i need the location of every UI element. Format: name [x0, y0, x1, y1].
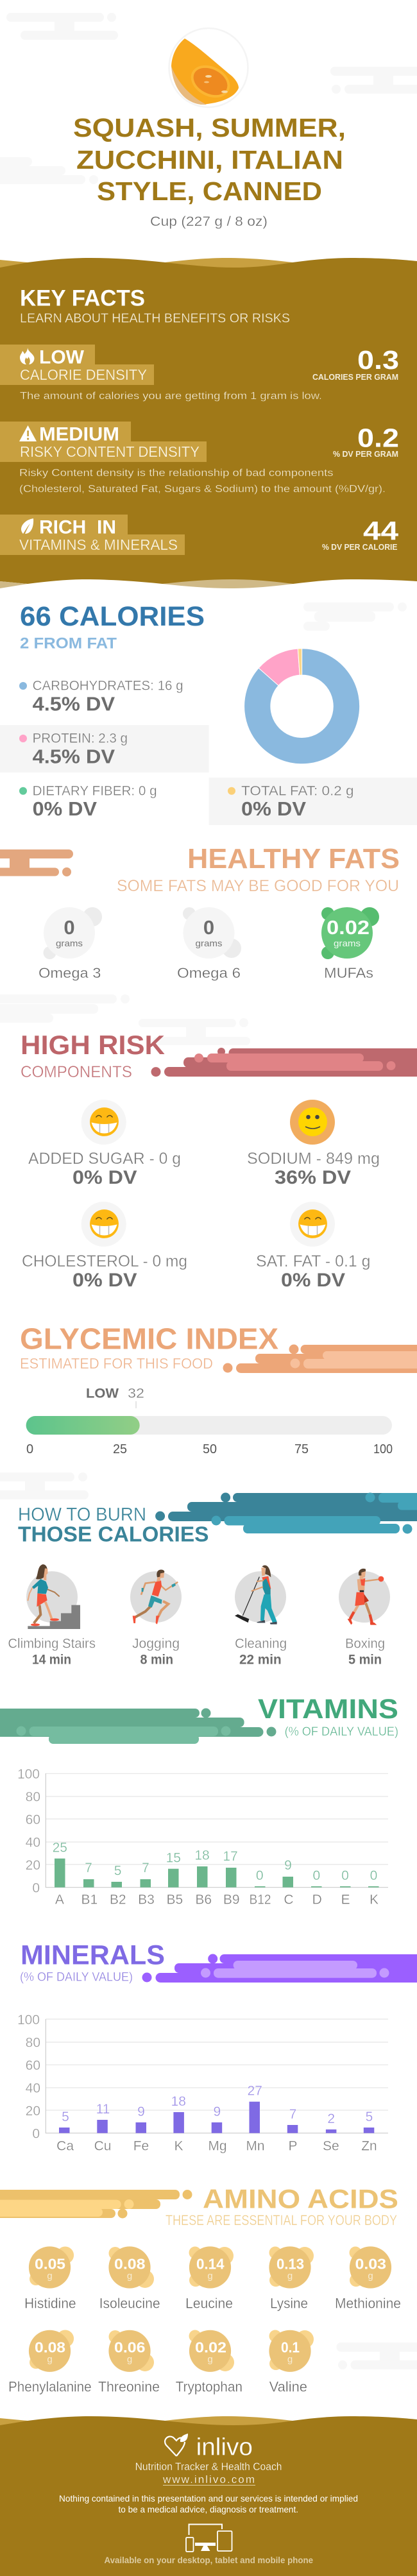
availability note: Available on your desktop, tablet and mobile phone	[104, 2555, 313, 2565]
amino: methionine: Methionine	[335, 2296, 401, 2311]
amino: histidine: Histidine	[24, 2296, 76, 2311]
amino: methionine	[335, 2246, 401, 2311]
amino: histidine: g	[47, 2271, 53, 2282]
bar chart: vitamins: 7	[85, 1861, 92, 1875]
bar chart: vitamins: B5	[167, 1893, 183, 1907]
panel: glycemic index	[20, 1322, 417, 1456]
bar chart: vitamins: 0	[370, 1868, 377, 1883]
heading: healthy fats: HEALTHY FATS	[187, 843, 400, 874]
bar chart: minerals: Zn	[361, 2139, 377, 2154]
value: dv per calorie: 44	[363, 516, 398, 545]
gauge scale: 0	[26, 1442, 33, 1456]
bar chart: minerals: 9	[213, 2104, 221, 2119]
amino: valine	[269, 2330, 314, 2394]
amino: valine: 0.1	[281, 2339, 300, 2356]
item: sodium: 36% DV	[275, 1167, 351, 1188]
bubble: omega 6	[177, 907, 241, 981]
row: total fat	[209, 778, 417, 825]
logo text: inlivo	[196, 2434, 253, 2461]
amino: phenylalanine: g	[47, 2354, 53, 2365]
activity: jogging: Jogging	[132, 1636, 180, 1651]
bar chart: vitamins: 0	[256, 1868, 264, 1883]
marker: low 32: LOW	[86, 1386, 119, 1401]
bar chart: minerals: 9	[137, 2104, 145, 2119]
item: cholesterol: CHOLESTEROL - 0 mg	[22, 1252, 187, 1270]
bar chart: vitamins: B2	[110, 1893, 126, 1907]
bar chart: minerals: 20	[26, 2104, 40, 2119]
amino: isoleucine: 0.08	[114, 2256, 146, 2273]
bar chart: minerals: Mn	[246, 2139, 265, 2154]
panel: healthy fats	[0, 843, 400, 981]
bar chart: vitamins: B9	[223, 1893, 240, 1907]
background decoration: pale cloud	[336, 2342, 417, 2369]
icon: woman sweeping	[235, 1565, 277, 1625]
icon: inlivo heart logo	[165, 2434, 188, 2456]
decorative banner: glycemic	[223, 1345, 417, 1373]
amino: histidine: 0.05	[35, 2256, 65, 2273]
bubble: mufas	[321, 907, 379, 981]
title: ZUCCHINI, ITALIAN	[76, 145, 343, 175]
amino: tryptophan	[176, 2330, 243, 2394]
item: sodium: SODIUM - 849 mg	[247, 1150, 380, 1168]
item: cholesterol: 0% DV	[72, 1270, 137, 1291]
bar chart: vitamins: 9	[284, 1858, 292, 1873]
decorative banner: amino acids	[0, 2190, 192, 2219]
bubble: omega 6: Omega 6	[177, 965, 241, 981]
website link: www.inlivo.com	[162, 2473, 255, 2486]
amino: lysine: 0.13	[277, 2256, 304, 2273]
subheading: healthy fats: SOME FATS MAY BE GOOD FOR YOU	[117, 877, 399, 895]
amino: valine: g	[287, 2354, 293, 2365]
bar chart: vitamins: 0	[313, 1868, 320, 1883]
amino: phenylalanine	[8, 2330, 92, 2394]
badge: low calorie density	[0, 345, 154, 385]
amino: phenylalanine: Phenylalanine	[8, 2379, 92, 2394]
subheading: components: COMPONENTS	[21, 1063, 132, 1081]
bar chart: vitamins: 0	[32, 1881, 40, 1895]
amino: threonine	[98, 2330, 160, 2394]
bar chart: minerals	[17, 2013, 388, 2154]
panel: vitamins	[0, 1694, 398, 1907]
row: dietary fiber: DIETARY FIBER: 0 g	[33, 783, 157, 798]
bar chart: minerals: 2	[327, 2111, 335, 2126]
amino: methionine: g	[368, 2271, 373, 2282]
amino: isoleucine: g	[127, 2271, 132, 2282]
gauge scale	[26, 1442, 393, 1456]
panel: how to burn calories	[0, 1472, 417, 1667]
icon: devices	[186, 2524, 232, 2552]
item: saturated fat: 0% DV	[281, 1270, 345, 1291]
icon: woman climbing stairs	[28, 1564, 80, 1629]
row: carbohydrates: CARBOHYDRATES: 16 g	[33, 678, 183, 694]
bar chart: vitamins: C	[284, 1893, 293, 1907]
bar chart: vitamins: 100	[17, 1767, 40, 1782]
bar chart: minerals: 40	[26, 2081, 40, 2095]
bar chart: minerals: 18	[171, 2094, 186, 2109]
activity: cleaning: Cleaning	[235, 1636, 287, 1651]
bar chart: vitamins: 25	[53, 1841, 67, 1855]
activity: jogging	[130, 1570, 182, 1667]
amino: lysine: Lysine	[270, 2296, 308, 2311]
disclaimer: Nothing contained in this presentation and our services is intended or implied	[59, 2493, 358, 2503]
amino: threonine: Threonine	[98, 2379, 160, 2394]
item: added sugar: ADDED SUGAR - 0 g	[28, 1150, 181, 1168]
bar chart: minerals: Mg	[208, 2139, 227, 2154]
background decoration: pale cloud	[0, 1472, 89, 1499]
icon: jogger	[133, 1570, 178, 1625]
row: dietary fiber	[19, 783, 157, 820]
background decoration: pale cloud top left	[6, 13, 118, 40]
description: risky content density	[19, 468, 386, 495]
bar chart: vitamins: 5	[114, 1864, 121, 1879]
bubble: omega 3: Omega 3	[38, 965, 101, 981]
background decoration: pale cloud left of title	[0, 157, 98, 184]
panel: high risk components	[0, 994, 417, 1291]
amino: tryptophan: Tryptophan	[176, 2379, 243, 2394]
bar chart: vitamins: 80	[26, 1790, 40, 1804]
icon: leaf	[21, 518, 33, 534]
bar chart: vitamins: B1	[81, 1893, 98, 1907]
bar chart: minerals: 0	[32, 2126, 40, 2142]
bar chart: vitamins: B6	[195, 1893, 212, 1907]
bar chart: minerals: 60	[26, 2058, 40, 2073]
disclaimer	[59, 2493, 358, 2514]
activity: boxing: Boxing	[345, 1636, 385, 1651]
badge: rich in vitamins and minerals	[0, 515, 185, 555]
heading: how to burn: HOW TO BURN	[18, 1505, 146, 1525]
panel: footer	[0, 2416, 417, 2576]
amino: leucine	[185, 2246, 234, 2311]
item: added sugar: 0% DV	[72, 1167, 137, 1188]
bar chart: minerals: Cu	[94, 2139, 111, 2154]
marker: low 32	[86, 1386, 144, 1408]
heading: vitamins: VITAMINS	[258, 1694, 398, 1725]
key facts subheading: LEARN ABOUT HEALTH BENEFITS OR RISKS	[20, 311, 290, 325]
donut chart: macronutrients	[244, 649, 360, 764]
value: dv per calorie: % DV PER CALORIE	[322, 542, 398, 552]
bubble: mufas: 0.02	[327, 916, 370, 939]
bar chart: minerals: 11	[96, 2102, 110, 2117]
bar chart: vitamins: 15	[166, 1851, 181, 1866]
amino: leucine: Leucine	[185, 2296, 233, 2311]
description: risky content density: Risky Content density is the relationship of bad components	[19, 468, 334, 479]
bar chart: vitamins: B3	[138, 1893, 155, 1907]
serving size: Cup (227 g / 8 oz)	[150, 214, 268, 229]
bubble: mufas: MUFAs	[324, 965, 373, 981]
amino: methionine: 0.03	[355, 2256, 386, 2273]
bar chart: vitamins: 20	[26, 1858, 40, 1873]
bar chart: minerals: 5	[366, 2110, 373, 2124]
row: carbohydrates	[19, 678, 183, 715]
bubble: mufas: grams	[334, 938, 361, 948]
activity: jogging: 8 min	[140, 1653, 173, 1667]
background decoration: cloud right	[303, 602, 407, 631]
heading: minerals: MINERALS	[21, 1940, 165, 1971]
decorative banner: minerals	[142, 1954, 417, 1983]
amino: histidine	[24, 2246, 76, 2311]
item: saturated fat	[256, 1202, 371, 1291]
amino: isoleucine: Isoleucine	[99, 2296, 160, 2311]
label: rich in: RICH IN	[39, 517, 116, 538]
decorative banner: vitamins	[0, 1708, 276, 1744]
row: protein: PROTEIN: 2.3 g	[33, 731, 128, 746]
amino: isoleucine	[99, 2246, 160, 2311]
decorative banner: burn	[155, 1492, 417, 1533]
row: protein	[0, 725, 209, 772]
value: dv per gram	[333, 423, 399, 459]
bar chart: vitamins: 60	[26, 1813, 40, 1827]
description: risky content density: (Cholesterol, Saturated Fat, Sugars & Sodium) to the amount (%DV/gr).	[19, 484, 386, 495]
bar chart: minerals: 7	[289, 2107, 296, 2122]
bubble: omega 6: grams	[195, 938, 222, 948]
bubble: omega 3: grams	[56, 938, 83, 948]
label: risky content density: RISKY CONTENT DENSITY	[20, 443, 200, 460]
heading: 66 calories: 66 CALORIES	[20, 602, 205, 632]
bar chart: minerals: 27	[248, 2084, 262, 2099]
bar chart: minerals: 80	[26, 2035, 40, 2051]
amino: threonine: 0.06	[114, 2339, 145, 2356]
amino: tryptophan: g	[207, 2354, 213, 2365]
amino: threonine: g	[127, 2354, 132, 2365]
bar chart: vitamins: A	[55, 1893, 64, 1907]
row: protein: 4.5% DV	[33, 745, 115, 767]
decorative banner: high risk	[151, 1048, 417, 1077]
bar chart: vitamins: B12	[249, 1893, 271, 1907]
bar chart: minerals: Ca	[56, 2139, 74, 2154]
value: calories per gram: CALORIES PER GRAM	[312, 372, 398, 382]
bar chart: vitamins: 0	[341, 1868, 349, 1883]
background decoration: pale clouds	[0, 994, 250, 1045]
label: vitamins and minerals: VITAMINS & MINERALS	[19, 536, 178, 553]
item: added sugar	[28, 1100, 181, 1188]
bar chart: vitamins: 17	[223, 1849, 238, 1864]
title: STYLE, CANNED	[97, 176, 322, 206]
bar chart: vitamins: D	[312, 1893, 322, 1907]
item: sodium	[247, 1100, 380, 1188]
subheading: minerals daily value: (% OF DAILY VALUE)	[20, 1970, 133, 1984]
gauge scale: 50	[203, 1442, 217, 1456]
row: carbohydrates: 4.5% DV	[33, 693, 115, 715]
background decoration: pale cloud top right	[330, 67, 417, 94]
bar chart: minerals: 5	[62, 2110, 69, 2124]
bubble: omega 6: 0	[203, 916, 214, 939]
amino: lysine	[269, 2246, 314, 2311]
gauge scale: 75	[294, 1442, 309, 1456]
value: dv per gram: 0.2	[357, 423, 399, 452]
heading: high risk: HIGH RISK	[21, 1030, 165, 1060]
item: saturated fat: SAT. FAT - 0.1 g	[256, 1252, 371, 1270]
bar chart: vitamins	[17, 1767, 388, 1907]
gauge scale: 25	[113, 1442, 127, 1456]
subheading: glycemic index: ESTIMATED FOR THIS FOOD	[20, 1355, 213, 1372]
value: dv per gram: % DV PER GRAM	[333, 449, 398, 459]
value: calories per gram	[312, 345, 399, 382]
activity: cleaning: 22 min	[239, 1653, 282, 1667]
amino: leucine: 0.14	[196, 2256, 225, 2273]
value: dv per calorie	[322, 516, 398, 552]
bar chart: vitamins: 40	[26, 1835, 40, 1850]
subheading: from fat: 2 FROM FAT	[20, 635, 117, 653]
title	[73, 113, 346, 206]
amino: lysine: g	[287, 2271, 293, 2282]
amino: leucine: g	[207, 2271, 213, 2282]
activity: cleaning	[235, 1565, 287, 1667]
bar chart: vitamins: 7	[142, 1861, 149, 1875]
bubble: omega 3: 0	[64, 916, 75, 939]
badge: medium risky content density	[0, 422, 207, 462]
activity: climbing stairs: 14 min	[32, 1653, 71, 1667]
gauge scale: 100	[373, 1442, 393, 1456]
label: calorie density: CALORIE DENSITY	[20, 366, 147, 383]
icon: squash photo	[169, 28, 248, 107]
title: SQUASH, SUMMER,	[73, 113, 346, 142]
heading: those calories: THOSE CALORIES	[18, 1523, 209, 1546]
key facts heading: KEY FACTS	[20, 286, 145, 311]
bar chart: vitamins: 18	[194, 1848, 210, 1863]
bar chart: vitamins: K	[370, 1893, 379, 1907]
activity: boxing: 5 min	[348, 1653, 382, 1667]
amino: valine: Valine	[269, 2379, 307, 2394]
heading: glycemic index: GLYCEMIC INDEX	[20, 1322, 278, 1355]
panel: calories	[0, 602, 417, 825]
activity: climbing stairs: Climbing Stairs	[8, 1636, 96, 1651]
row: dietary fiber: 0% DV	[33, 798, 97, 820]
bar chart: minerals: Se	[323, 2139, 339, 2154]
bubble: omega 3	[38, 907, 102, 981]
activity: climbing stairs	[8, 1564, 96, 1667]
panel: amino acids	[0, 2184, 417, 2394]
subheading: vitamins daily value: (% OF DAILY VALUE)	[285, 1725, 398, 1739]
bar chart: minerals: 100	[17, 2013, 40, 2027]
value: calories per gram: 0.3	[357, 345, 399, 375]
icon: flame	[20, 348, 34, 364]
disclaimer: to be a medical advice, diagnosis or treatment.	[118, 2504, 298, 2514]
panel: minerals	[17, 1940, 417, 2154]
decorative banner: healthy fats	[0, 849, 73, 876]
activity: boxing	[339, 1569, 390, 1667]
panel: key facts	[0, 258, 417, 588]
icon: boxer	[348, 1569, 384, 1625]
description: calorie density: The amount of calories you are getting from 1 gram is low.	[20, 391, 322, 402]
bar chart: minerals: Fe	[133, 2139, 149, 2154]
heading: amino acids: AMINO ACIDS	[203, 2184, 398, 2214]
icon: warning triangle	[19, 425, 37, 441]
marker: low 32: 32	[128, 1386, 144, 1401]
amino: phenylalanine: 0.08	[35, 2339, 65, 2356]
tagline: Nutrition Tracker & Health Coach	[135, 2461, 282, 2473]
label: medium: MEDIUM	[39, 424, 119, 445]
item: cholesterol	[22, 1202, 187, 1291]
amino: tryptophan: 0.02	[195, 2339, 226, 2356]
bar chart: vitamins: E	[341, 1893, 350, 1907]
bar chart: minerals: K	[174, 2139, 183, 2154]
row: total fat: TOTAL FAT: 0.2 g	[241, 783, 354, 798]
gauge bar	[26, 1416, 392, 1435]
label: low: LOW	[39, 347, 84, 368]
row: total fat: 0% DV	[241, 798, 306, 820]
bar chart: minerals: P	[288, 2139, 298, 2154]
